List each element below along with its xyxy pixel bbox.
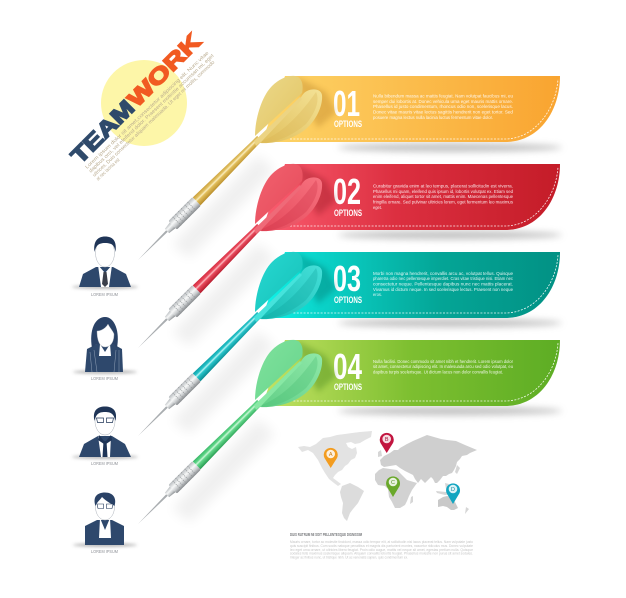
person 2: woman with dark hair	[73, 317, 137, 381]
panel: option 04: sit amet, consectetur adipiscing elit. In malesuada arcu sed odio volutpat, eu	[373, 364, 514, 369]
panel: option 04: Nulla facilisi. Donec commodo sit amet nibh et hendrerit. Lorem ipsum dolor	[373, 359, 514, 364]
dart 2: red	[134, 164, 336, 352]
map caption heading: DUIS RUTRUM MI SOIT PELLENTESQUE DIGNISSIM	[290, 532, 362, 537]
map pin A: orange	[324, 448, 338, 468]
panel: option 01: posuere magna lectus nulla lacinia luctus fermentum vitae dolor.	[373, 115, 493, 120]
title description text: dapibus orci, vel eleifend dolor. Praesent molestie accumsan mi, eget	[88, 53, 216, 174]
panel: option 01: Phasellus id justo condimentum, rhoncus odio non, scelerisque lacus.	[373, 104, 513, 109]
person label: LOREM IPSUM	[91, 376, 118, 381]
panel: option 04: OPTIONS	[334, 382, 362, 393]
panel: option 02: Phasellus mi quam, eleifend quis ipsum id, lobortis volutpat ex. Etiam sed	[373, 189, 514, 194]
dart 1: yellow	[134, 76, 336, 264]
panel: option 02: fringilla ornare. Sed pulvinar ultricies lorem, eget fermentum leo maximus	[373, 200, 514, 204]
option number: 01	[333, 83, 360, 124]
person 3: man with glasses and dark tie	[72, 406, 138, 466]
title: TEAMWORK: TEAM	[66, 95, 139, 169]
panel: option 03: OPTIONS	[334, 295, 362, 306]
panel: option 02: OPTIONS	[334, 208, 362, 219]
map pin B: crimson: B	[385, 437, 389, 443]
title description text: ultrices. Duis consectetur aliquam malesuada. Ut eget mi mollis, commodo	[92, 60, 216, 178]
panel: option 01	[262, 76, 562, 152]
panel: option 03: eros.	[373, 292, 382, 297]
option number: 04	[333, 346, 362, 387]
panel: option 02	[262, 164, 562, 240]
person label: LOREM IPSUM	[91, 292, 118, 297]
title description text: at nec lacinia est	[95, 157, 122, 182]
map pin D: blue	[446, 483, 460, 504]
title description text: Lorem ipsum dolor sit amet,consectetur adipiscing elit. Nunc vitae	[84, 50, 210, 170]
map caption text	[290, 540, 473, 560]
map pin B: crimson	[380, 433, 394, 453]
map pin A: orange: A	[329, 452, 333, 458]
panel: option 04	[262, 340, 562, 416]
panel: option 02: eget.	[373, 205, 382, 210]
panel: option 01: OPTIONS	[334, 119, 362, 130]
map pin C: green: C	[391, 480, 395, 486]
map pin D: blue: D	[451, 487, 455, 493]
decorative circle	[101, 60, 187, 146]
map caption text: Integer ac finibus nunc, ut tristique nibh. Ut ac venenatis sapien, quis condimentum ex.	[290, 556, 408, 560]
panel: option 03	[262, 252, 562, 328]
map caption text: leo eget urna ornare, ut ultricies libero feugiat. Proin odio augue, mattis vel neque sit amet, egestas pretium nulla. Quisque	[290, 548, 473, 552]
world map	[298, 431, 477, 521]
dart 3: teal	[134, 252, 336, 440]
panel: option 03: pharetra odio nec pellentesque imperdiet. Cras vitae tristique nisi. Etiam nec	[373, 276, 514, 281]
option number: 02	[333, 171, 361, 212]
map pin C: green	[386, 476, 400, 497]
panel: option 03: Vivamus id dictum neque. In sed scelerisque lectus. Praesent non neque	[373, 287, 514, 292]
panel: option 01: semper dui lobortis at. Donec vehicula urna eget mauris mattis ornare.	[373, 99, 513, 104]
person 4: woman with glasses	[73, 492, 137, 554]
panel: option 02: Curabitur gravida enim at leo tempus, placerat sollicitudin est viverra.	[373, 184, 513, 188]
title: TEAMWORK	[66, 28, 206, 169]
panel: option 01: Donec vitae mauris vitae lectus sagittis hendrerit non eget tortor. Sed	[373, 110, 514, 114]
dart 4: green	[134, 340, 336, 528]
person label: LOREM IPSUM	[91, 461, 118, 466]
map caption text: sodales felis maximus scelerisque aliquam. Aliquam convallis lobortis feugiat. Phasellus molestie non purus sit amet sodales.	[290, 552, 473, 556]
panel: option 03: consectetur neque. Pellentesque dapibus nunc nec mattis placerat.	[373, 282, 513, 286]
option number: 03	[333, 258, 361, 299]
panel: option 01: Nulla bibendum massa ac mattis feugiat. Nam volutpat faucibus mi, eu	[373, 94, 514, 98]
map caption text: Mauris ornare, tortor ac molestie tincidunt, massa odio tempor elit, at sollicitudin nisl lacus placerat tellus. Nam vulputate justo	[290, 540, 473, 544]
person 1: man with striped tie	[72, 236, 138, 297]
panel: option 04: dapibus turpis scelerisque. Ut dictum lacus non dolor convallis feugiat.	[373, 370, 503, 374]
map caption text: quis suscipit finibus. Cum sociis natoque penatibus et magnis dis parturient montes, nascetur ridiculus mus. Donec vulputate	[290, 544, 473, 548]
person label: LOREM IPSUM	[91, 549, 118, 554]
panel: option 02: enim eleifend, aliquet tortor sit amet, mattis enim. Maecenas pellentesque	[373, 194, 514, 199]
title: TEAMWORK: WORK	[122, 28, 206, 112]
panel: option 03: Morbi non magna hendrerit, convallis arcu ac, volutpat tellus. Quisque	[373, 271, 514, 276]
